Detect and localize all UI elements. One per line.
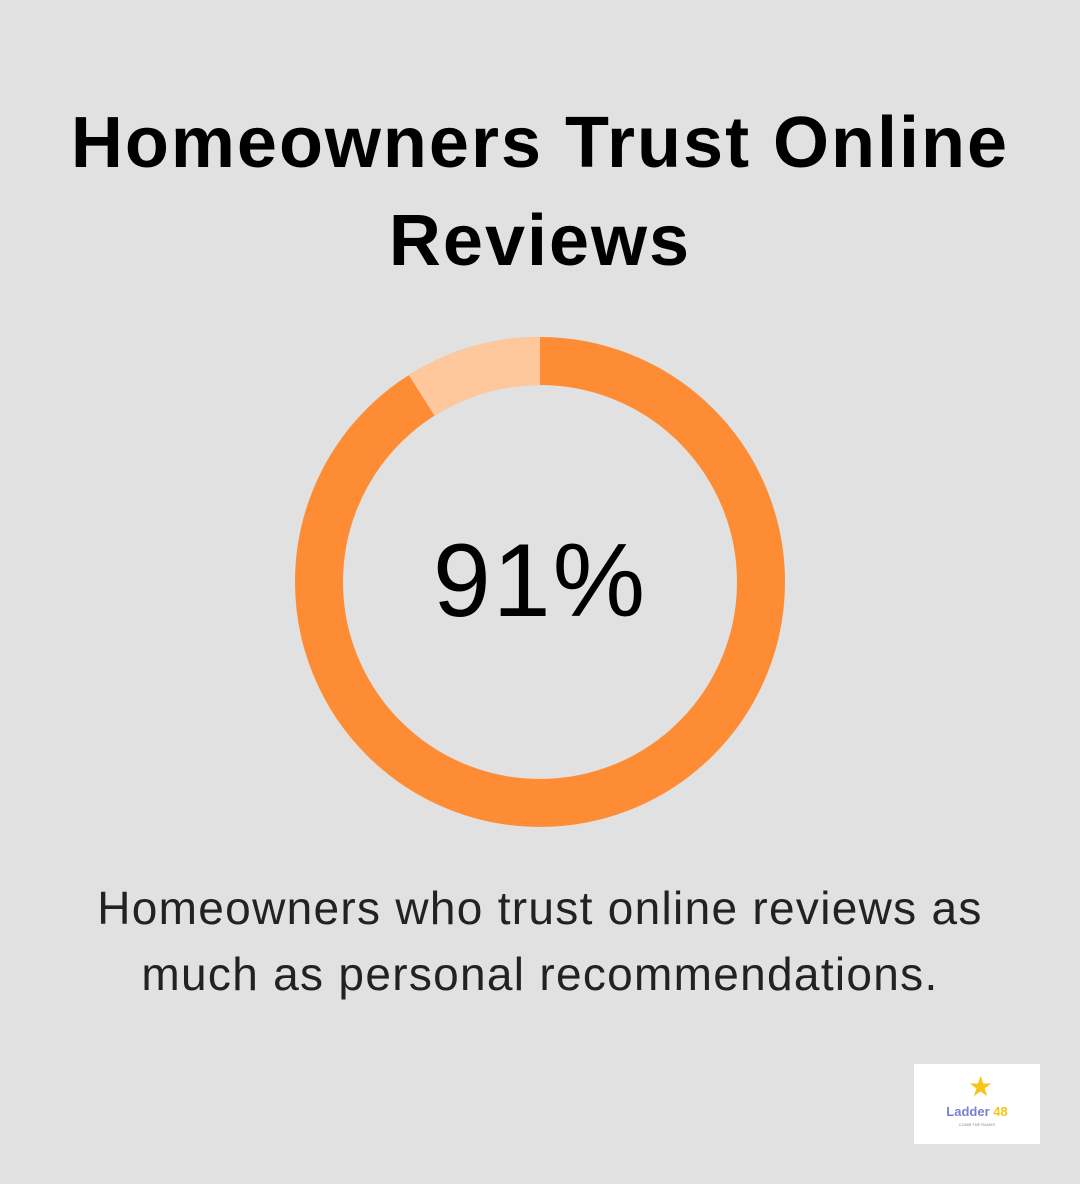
title: Reviews: [389, 201, 691, 281]
logo: ★: [968, 1071, 993, 1102]
caption: [97, 882, 983, 1000]
title: Homeowners Trust Online: [71, 103, 1009, 183]
caption: much as personal recommendations.: [141, 948, 939, 1000]
logo: [914, 1064, 1040, 1144]
logo: CLIMB THE RANKS: [959, 1122, 995, 1127]
title: [71, 103, 1009, 281]
stat number: 91%: [433, 523, 647, 639]
logo: Ladder 48: [946, 1104, 1008, 1119]
caption: Homeowners who trust online reviews as: [97, 882, 983, 934]
